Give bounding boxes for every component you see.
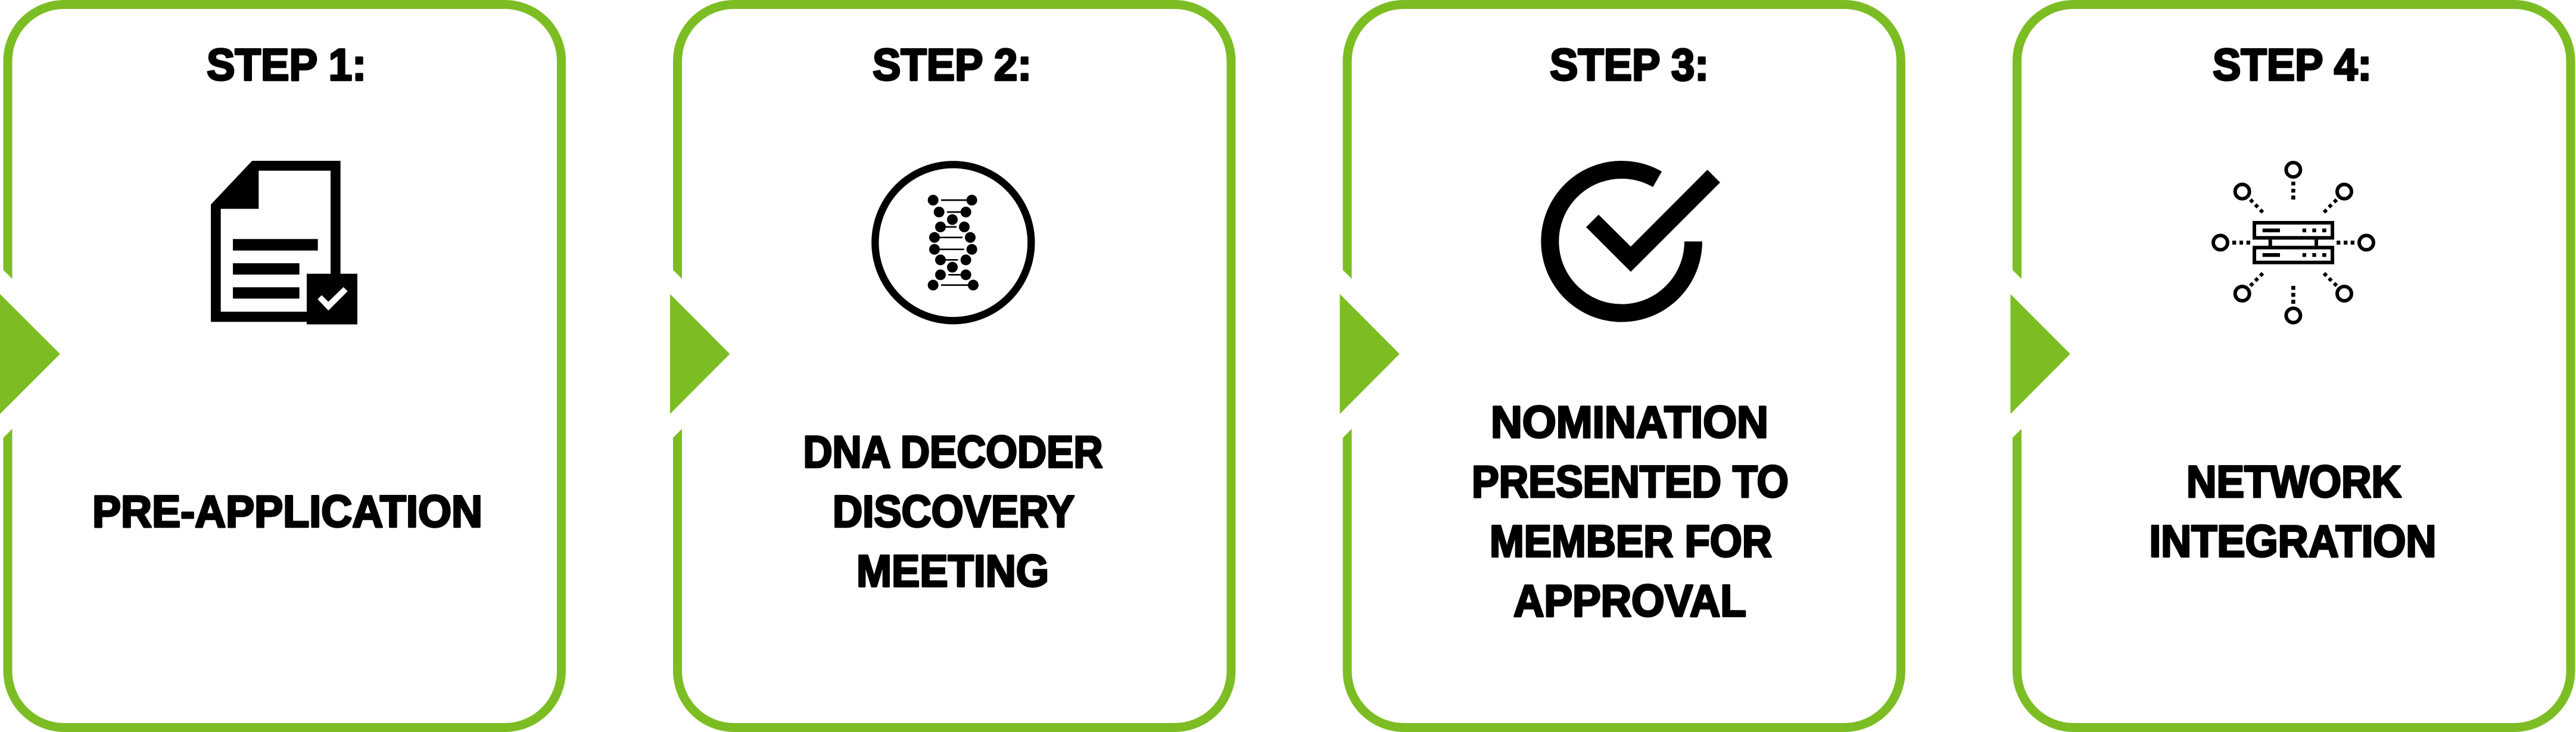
heading: step 4: STEP 4: <box>2213 39 2372 89</box>
label: network integration: NETWORK <box>2186 456 2401 506</box>
label: nomination presented to member for approval: PRESENTED TO <box>1472 456 1789 506</box>
label: nomination presented to member for approval: MEMBER FOR <box>1490 516 1772 566</box>
card frame: step 3 <box>1347 5 1901 728</box>
label: DNA decoder discovery meeting: DNA DECODER <box>803 426 1103 476</box>
label: nomination presented to member for approval <box>1472 397 1789 625</box>
heading: step 1: STEP 1: <box>207 39 366 89</box>
icon: DNA helix in circle <box>875 164 1031 320</box>
border gap: step 3 <box>1342 269 1352 438</box>
label: network integration <box>2149 456 2436 566</box>
card frame: step 4 <box>2017 5 2571 728</box>
label: pre-application: PRE-APPLICATION <box>92 486 482 536</box>
icon: document with checkmark <box>211 161 357 325</box>
panel: step 2 DNA decoder discovery meeting <box>670 5 1231 728</box>
arrow: step 3 <box>1340 294 1400 414</box>
label: nomination presented to member for approval: APPROVAL <box>1513 575 1746 625</box>
arrow: step 1 <box>0 294 60 414</box>
border gap: step 4 <box>2012 269 2022 438</box>
label: network integration: INTEGRATION <box>2149 516 2436 566</box>
heading: step 2: STEP 2: <box>873 39 1032 89</box>
card frame: step 1 <box>8 5 561 728</box>
label: DNA decoder discovery meeting <box>803 426 1103 596</box>
label: nomination presented to member for approval: NOMINATION <box>1491 397 1768 447</box>
card frame: step 2 <box>678 5 1231 728</box>
panel: step 1 pre-application <box>0 5 561 728</box>
arrow: step 2 <box>670 294 730 414</box>
border gap: step 2 <box>672 269 683 438</box>
heading: step 3: STEP 3: <box>1550 39 1709 89</box>
panel: step 3 nomination presented to member for approval <box>1340 5 1901 728</box>
icon: circular checkmark <box>1550 170 1720 313</box>
label: DNA decoder discovery meeting: MEETING <box>856 546 1049 596</box>
panel: step 4 network integration <box>2011 5 2571 728</box>
label: DNA decoder discovery meeting: DISCOVERY <box>833 486 1074 536</box>
icon: network server with nodes <box>2213 163 2373 323</box>
arrow: step 4 <box>2011 294 2070 414</box>
border gap: step 1 <box>2 269 13 438</box>
